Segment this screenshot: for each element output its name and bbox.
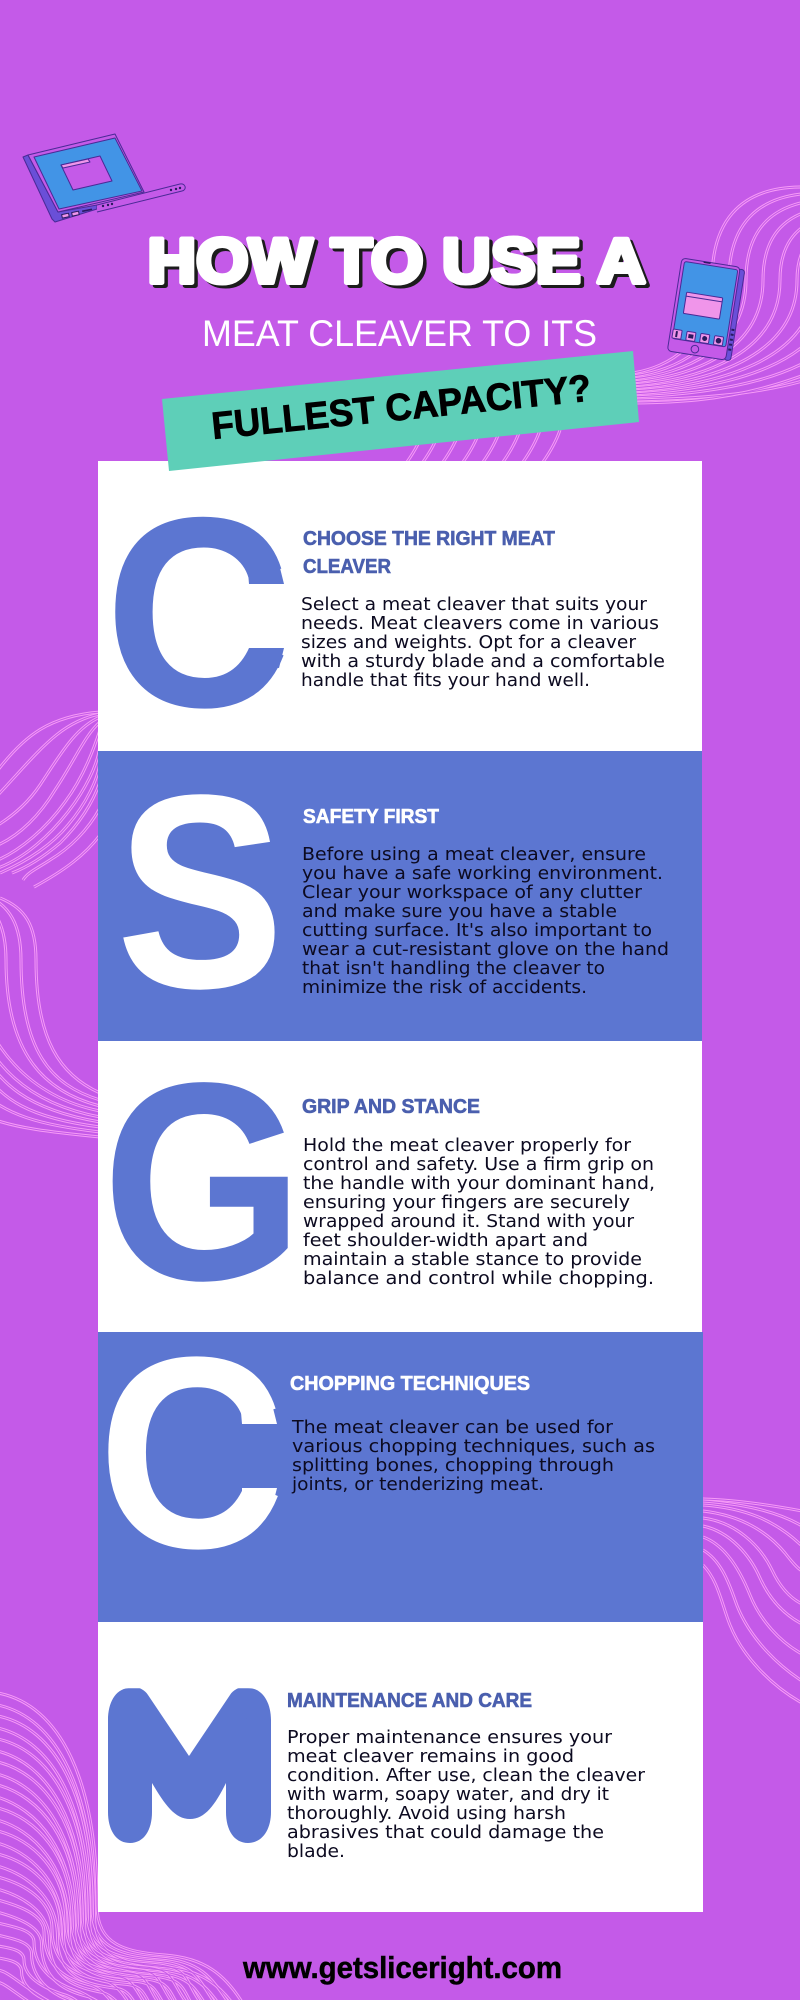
body text: ensuring your fingers are securely [303, 1193, 630, 1213]
body text: maintain a stable stance to provide [303, 1250, 642, 1270]
body text: with a sturdy blade and a comfortable [301, 652, 665, 672]
heading: CHOPPING TECHNIQUES [290, 1373, 530, 1395]
panel: grip and stance [98, 1025, 702, 1339]
title: how to use a: HOW TO USE A [151, 230, 649, 300]
banner: fullest capacity [162, 351, 639, 471]
body text: handle that fits your hand well. [301, 671, 590, 691]
letter C: C [98, 1301, 285, 1605]
body text: control and safety. Use a firm grip on [303, 1155, 654, 1175]
body text: Hold the meat cleaver properly for [303, 1136, 632, 1156]
body text: and make sure you have a stable [302, 902, 617, 922]
body text: Proper maintenance ensures your [287, 1728, 613, 1748]
heading: MAINTENANCE AND CARE [287, 1690, 532, 1712]
body text: feet shoulder-width apart and [303, 1231, 588, 1251]
letter S: S [116, 739, 284, 1046]
banner: fullest capacity: FULLEST CAPACITY? [210, 368, 593, 448]
body text: that isn't handling the cleaver to [302, 959, 605, 979]
subtitle: MEAT CLEAVER TO ITS [202, 313, 597, 354]
wave decoration: bottom left [0, 1693, 242, 2000]
body text: splitting bones, chopping through [292, 1456, 614, 1476]
body text: the handle with your dominant hand, [303, 1174, 655, 1194]
body text [303, 1136, 655, 1289]
wave decoration: left upper [0, 712, 100, 887]
panel: safety first [98, 739, 702, 1046]
panel: chopping techniques [98, 1301, 703, 1622]
heading: CLEAVER [303, 556, 392, 578]
panel: maintenance and care [98, 1622, 703, 1912]
body text: Before using a meat cleaver, ensure [302, 845, 646, 865]
letter C: C [105, 462, 291, 764]
body text: sizes and weights. Opt for a cleaver [301, 633, 637, 653]
wave decoration: right lower [703, 1499, 800, 1703]
body text: condition. After use, clean the cleaver [287, 1766, 646, 1786]
body text [301, 595, 665, 691]
footer url: www.getsliceright.com [242, 1950, 562, 1985]
body text: Clear your workspace of any clutter [302, 883, 643, 903]
body text: Select a meat cleaver that suits your [301, 595, 648, 615]
body text: balance and control while chopping. [303, 1269, 654, 1289]
body text: joints, or tenderizing meat. [291, 1475, 544, 1495]
wave decoration: top right [407, 187, 800, 462]
icon: laptop [23, 134, 185, 222]
body text: various chopping techniques, such as [292, 1437, 655, 1457]
body text: needs. Meat cleavers come in various [301, 614, 659, 634]
icon: phone [667, 258, 745, 361]
letter M: M [107, 1660, 273, 1872]
heading: GRIP AND STANCE [302, 1096, 480, 1118]
body text: meat cleaver remains in good [287, 1747, 574, 1767]
body text: wrapped around it. Stand with your [303, 1212, 635, 1232]
body text: you have a safe working environment. [302, 864, 663, 884]
heading: CHOOSE THE RIGHT MEAT [303, 528, 555, 550]
body text: cutting surface. It's also important to [302, 921, 652, 941]
body text [302, 845, 669, 998]
body text: blade. [287, 1842, 345, 1862]
body text [291, 1418, 655, 1495]
body text: abrasives that could damage the [287, 1823, 604, 1843]
title: how to use a: HOW TO USE A [148, 226, 646, 296]
wave decoration: left middle [0, 892, 100, 1137]
heading [303, 528, 555, 578]
panel: choose the right meat cleaver [98, 461, 702, 764]
body text: with warm, soapy water, and dry it [287, 1785, 609, 1805]
body text: wear a cut-resistant glove on the hand [302, 940, 669, 960]
body text: The meat cleaver can be used for [291, 1418, 614, 1438]
letter G: G [102, 1025, 304, 1339]
body text [287, 1728, 646, 1862]
body text: thoroughly. Avoid using harsh [287, 1804, 566, 1824]
heading: SAFETY FIRST [303, 806, 439, 828]
body text: minimize the risk of accidents. [302, 978, 587, 998]
